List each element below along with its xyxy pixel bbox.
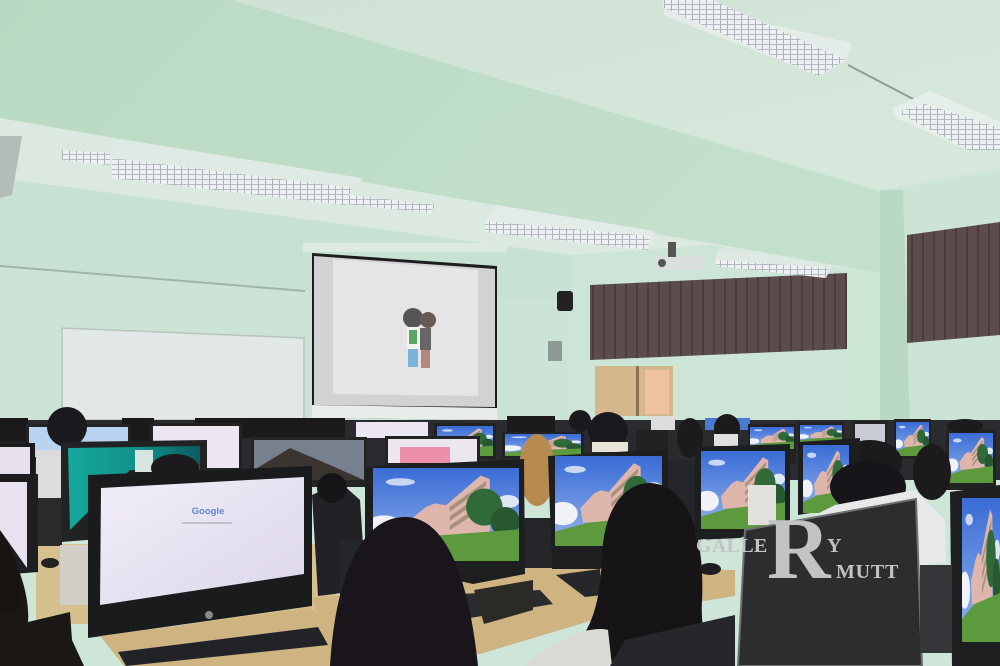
- watermark: R: [767, 501, 832, 598]
- ceiling light: left long: [62, 139, 436, 213]
- projection screen: [303, 243, 507, 420]
- left desk: [100, 608, 340, 666]
- back of near monitor: [738, 499, 922, 666]
- blinds: back window: [590, 273, 847, 360]
- ceiling light: back: [714, 248, 832, 278]
- ceiling light: front right: [662, 0, 915, 100]
- right chair: [920, 565, 952, 653]
- back row of monitors and desks: [0, 416, 1000, 490]
- cartoon characters: [403, 308, 436, 368]
- watermark: GALLE: [696, 535, 768, 557]
- middle row monitors: [0, 436, 480, 624]
- keyboard by bag: [460, 590, 553, 618]
- left air conditioner: [0, 136, 22, 198]
- ceiling: [230, 0, 1000, 190]
- middle monitor with wallpaper: [364, 459, 525, 584]
- front left student hair: [0, 532, 21, 612]
- watermark: Y: [827, 535, 842, 557]
- right front monitor: [548, 449, 668, 597]
- front monitor with Google page: [88, 466, 312, 645]
- fifth monitor: [798, 438, 860, 515]
- soffit beam: [0, 0, 882, 273]
- front keyboard: [118, 627, 328, 666]
- lower ceiling under beam: [0, 118, 880, 273]
- ceiling light: far right: [893, 91, 1000, 150]
- watermark: [696, 501, 899, 598]
- blinds: right window: [907, 222, 1000, 343]
- wall socket box: [548, 341, 562, 361]
- student at middle monitor: [330, 517, 478, 666]
- back row students: [36, 407, 983, 506]
- right wall: [903, 170, 1000, 430]
- projector: [654, 242, 704, 270]
- far right monitor: [950, 485, 1000, 666]
- left rear wall: [0, 178, 590, 420]
- front desk: [312, 568, 735, 654]
- front monitor with Google page: Google: [192, 506, 224, 517]
- handbag: [474, 580, 533, 624]
- front left student: [0, 535, 84, 666]
- structural column: [848, 190, 910, 432]
- dividers between monitors: [340, 460, 698, 596]
- right students: [815, 461, 946, 566]
- door: [595, 366, 673, 416]
- fourth monitor: [695, 444, 790, 540]
- left edge monitor: [0, 474, 38, 575]
- wall speaker: [557, 291, 573, 311]
- mouse on desk: [699, 563, 721, 575]
- watermark: MUTT: [836, 561, 899, 583]
- student at right monitor: [553, 483, 705, 666]
- ceiling light: centre: [485, 205, 654, 250]
- whiteboard: [62, 328, 304, 420]
